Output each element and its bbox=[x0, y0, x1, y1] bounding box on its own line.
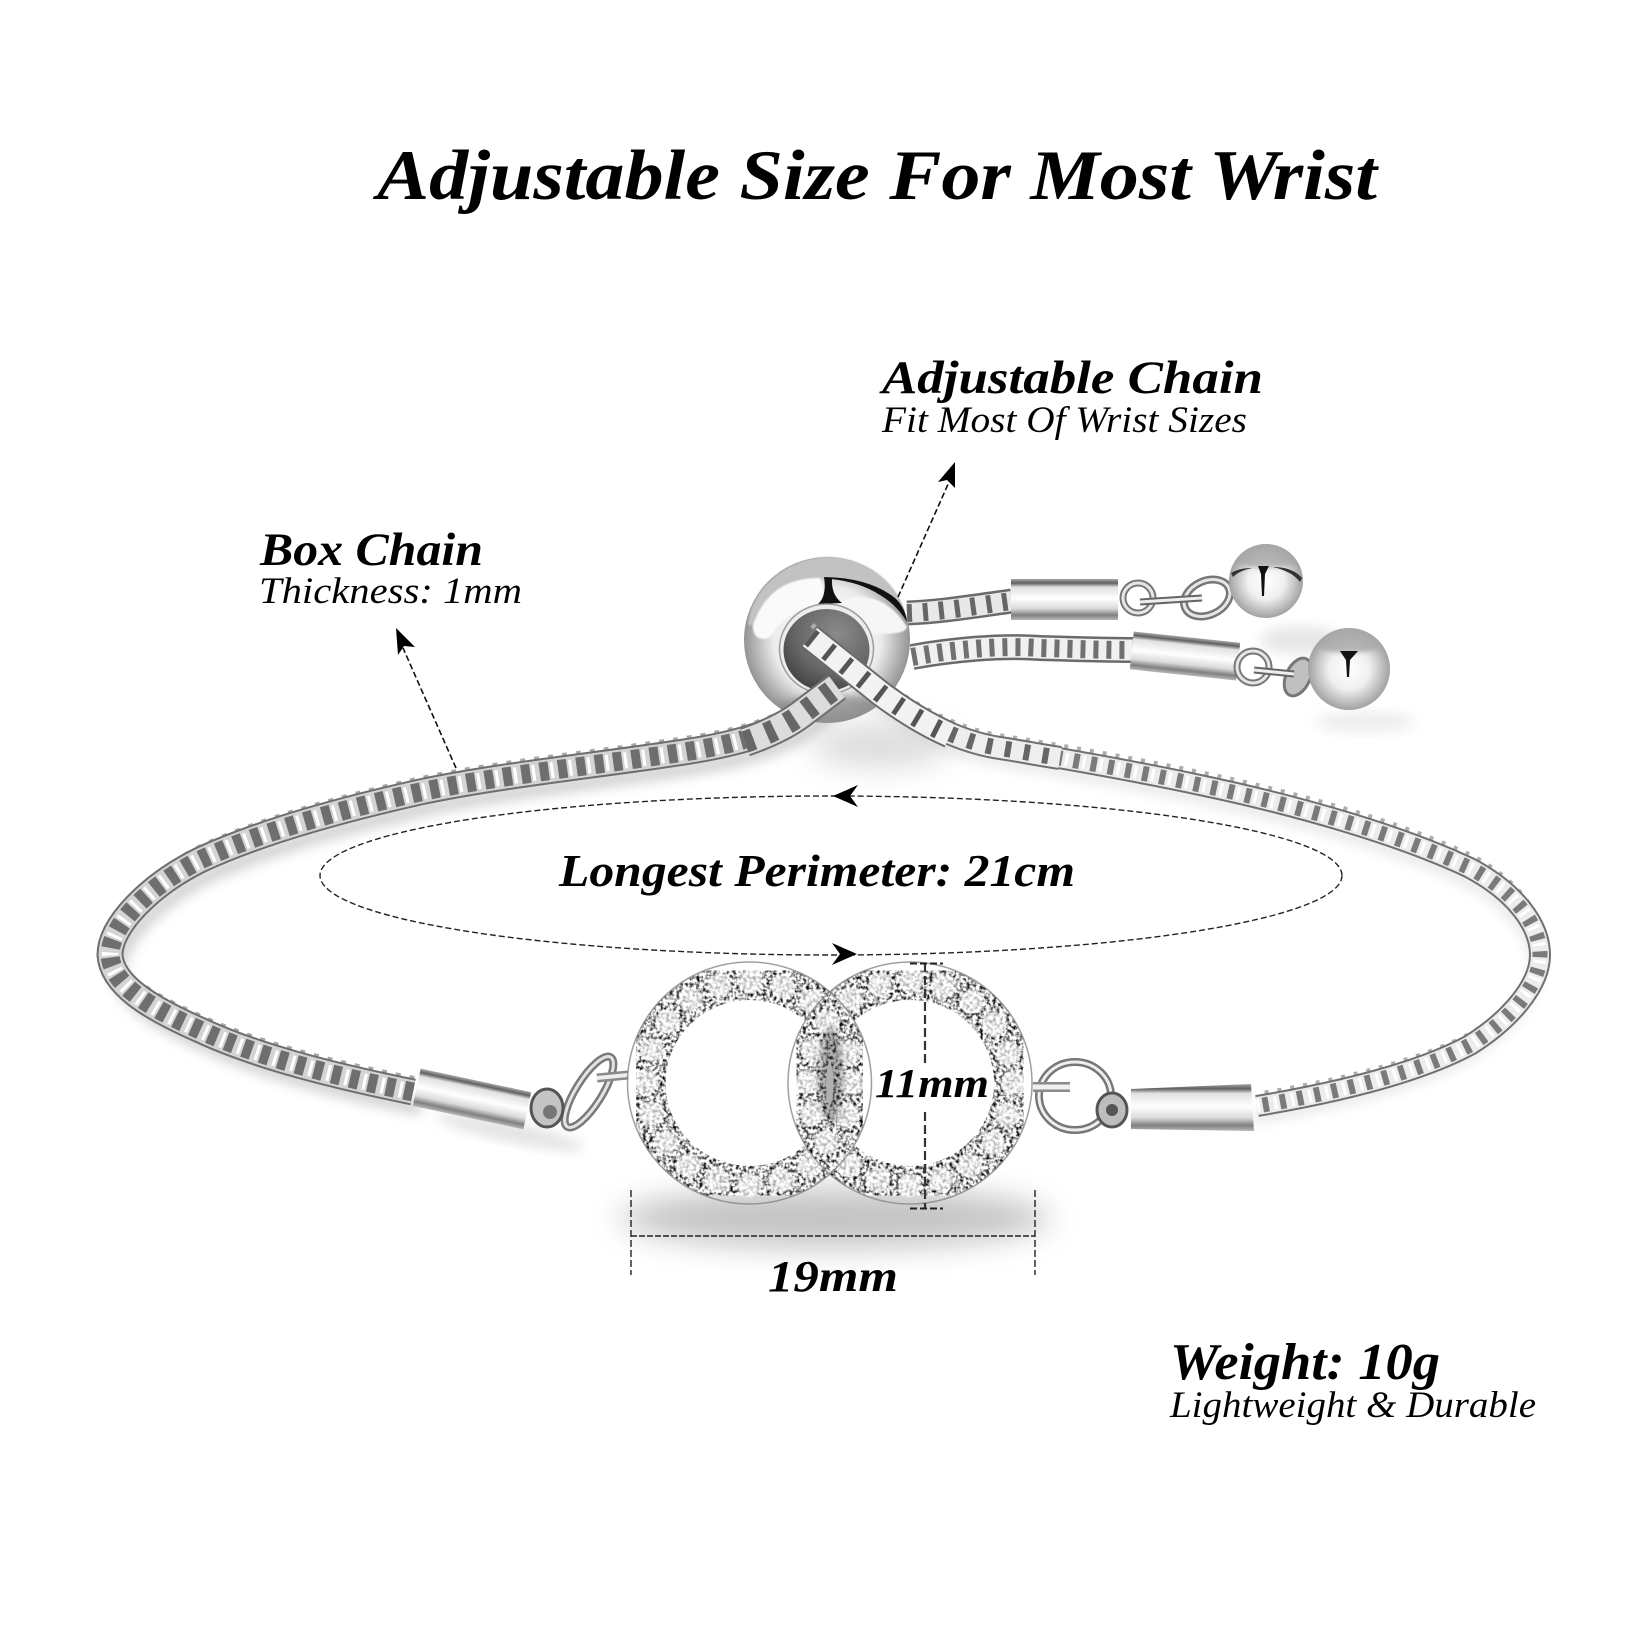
clasp links left bbox=[531, 1050, 628, 1134]
box chain right bbox=[810, 625, 1542, 1106]
title: Adjustable Size For Most Wrist bbox=[373, 137, 1379, 215]
box chain callout: Box Chain bbox=[259, 524, 483, 576]
clasp tube left bbox=[413, 1069, 531, 1129]
weight callout: Lightweight & Durable bbox=[1169, 1385, 1536, 1426]
arrow: adjustable chain bbox=[898, 462, 955, 597]
perimeter label: Longest Perimeter: 21cm bbox=[558, 846, 1075, 896]
dimension: 19mm: 19mm bbox=[768, 1252, 898, 1301]
tail tube upper bbox=[1011, 579, 1118, 620]
box chain callout bbox=[259, 524, 522, 612]
box chain callout: Thickness: 1mm bbox=[259, 571, 522, 612]
perimeter dashed ellipse with arrows bbox=[320, 785, 1342, 965]
clasp tube right bbox=[1131, 1084, 1254, 1131]
bracelet shadows bbox=[118, 626, 1536, 1248]
slider bead bbox=[744, 557, 910, 728]
dimension: 19mm bbox=[631, 1190, 1035, 1301]
dimension: 11mm: 11mm bbox=[875, 1060, 989, 1106]
pave rings bbox=[628, 962, 1032, 1204]
adjustable chain callout: Fit Most Of Wrist Sizes bbox=[881, 400, 1247, 441]
adjustable chain callout: Adjustable Chain bbox=[879, 352, 1263, 404]
weight callout: Weight: 10g bbox=[1170, 1334, 1440, 1391]
clasp links right bbox=[1033, 1062, 1127, 1130]
box chain left bbox=[110, 674, 838, 1092]
tail tube lower bbox=[1130, 632, 1240, 680]
tail links upper bbox=[1123, 572, 1236, 624]
ball end upper bbox=[1229, 544, 1303, 618]
tail links lower bbox=[1237, 651, 1317, 700]
adjustable chain callout bbox=[879, 352, 1263, 441]
dimension: 11mm bbox=[875, 963, 989, 1208]
ball end lower bbox=[1308, 628, 1390, 710]
arrow: box chain bbox=[396, 628, 456, 768]
weight callout bbox=[1169, 1334, 1536, 1426]
adjustable tail chains bbox=[907, 601, 1134, 657]
